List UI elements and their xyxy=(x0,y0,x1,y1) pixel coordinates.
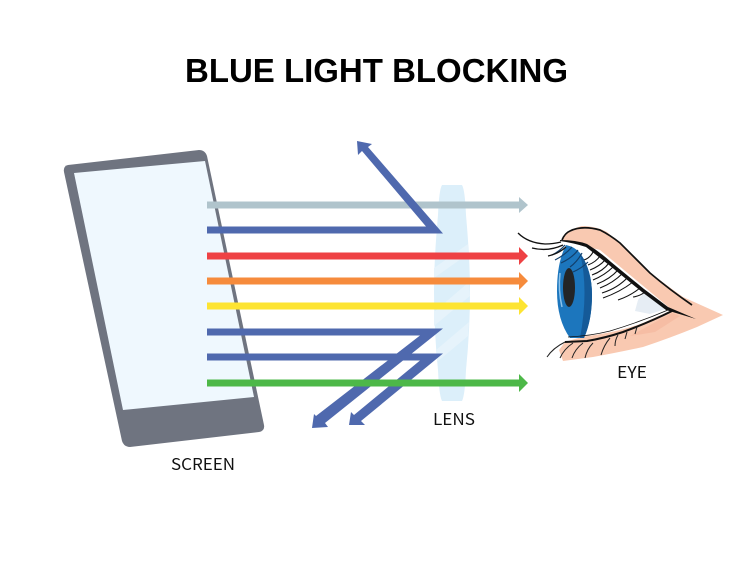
reflected blue ray: top xyxy=(207,141,443,234)
yellow ray with arrow xyxy=(207,297,528,315)
label: screen: SCREEN xyxy=(171,451,235,475)
eyelid and under-eye skin xyxy=(559,226,723,361)
eyelid crease xyxy=(562,228,692,305)
label: lens: LENS xyxy=(433,406,475,430)
lash strokes over the iris xyxy=(552,245,588,272)
title: BLUE LIGHT BLOCKING xyxy=(185,52,568,89)
lens xyxy=(434,185,470,401)
grey ray with arrow xyxy=(207,197,528,213)
upper eyelid margin xyxy=(560,240,696,319)
lower eyelashes xyxy=(547,327,637,358)
upper eyelashes xyxy=(518,233,566,256)
reflected blue rays: bottom xyxy=(207,328,443,428)
pupil xyxy=(563,268,575,307)
under-eye shadow xyxy=(630,313,680,336)
eye corner shadow xyxy=(635,291,669,314)
orange ray with arrow xyxy=(207,272,528,290)
iris xyxy=(557,245,592,338)
lower eyelid lines xyxy=(568,310,668,337)
phone screen device xyxy=(64,150,264,447)
green ray with arrow xyxy=(207,374,528,392)
eye xyxy=(518,226,723,361)
label: eye: EYE xyxy=(617,359,647,383)
eyeball white xyxy=(565,242,672,338)
lash strokes inside the eye xyxy=(584,252,645,300)
red ray with arrow xyxy=(207,247,528,265)
